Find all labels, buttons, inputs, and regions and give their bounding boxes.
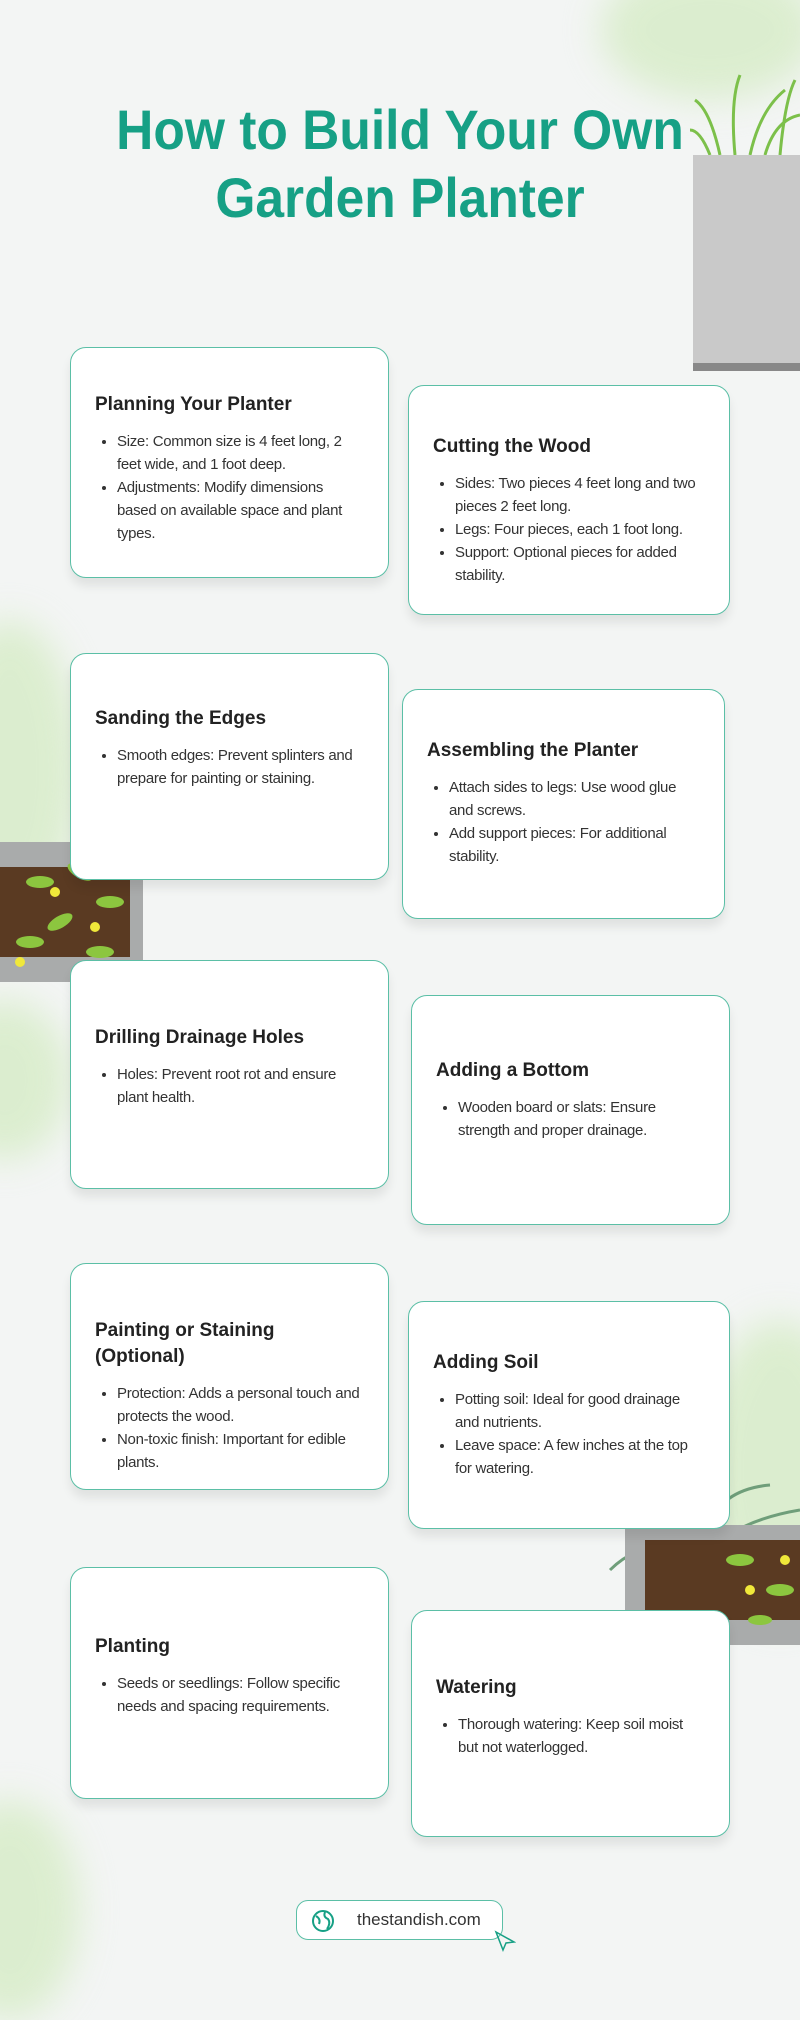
card: Drilling Drainage Holes <box>70 960 389 1189</box>
card: Sanding the Edges: Sanding the Edges <box>95 708 266 729</box>
title <box>116 98 684 229</box>
card: Planning Your Planter: Planning Your Planter <box>95 394 292 415</box>
card: Sanding the Edges <box>70 653 389 880</box>
card: Assembling the Planter: Add support pieces: For additional stability. <box>449 825 666 865</box>
card: Adding a Bottom <box>411 995 730 1225</box>
card: Assembling the Planter <box>402 689 725 919</box>
card: Drilling Drainage Holes: Holes: Prevent root rot and ensure plant health. <box>117 1066 336 1106</box>
card: Cutting the Wood: Cutting the Wood <box>433 436 591 457</box>
card: Sanding the Edges: Smooth edges: Prevent splinters and prepare for painting or staining. <box>117 747 352 787</box>
card: Adding a Bottom: Wooden board or slats: Ensure strength and proper drainage. <box>458 1099 656 1139</box>
card: Painting or Staining: Non-toxic finish: Important for edible plants. <box>117 1431 346 1471</box>
title: Garden Planter <box>215 166 585 229</box>
card: Painting or Staining: Painting or Staining (Optional) <box>95 1320 274 1367</box>
card: Cutting the Wood <box>408 385 730 615</box>
card: Assembling the Planter: Attach sides to legs: Use wood glue and screws. <box>449 779 676 819</box>
card: Watering <box>411 1610 730 1837</box>
card: Watering: Watering <box>436 1677 517 1698</box>
card: Planning Your Planter: Size: Common size is 4 feet long, 2 feet wide, and 1 foot deep. <box>117 433 342 473</box>
card: Adding Soil: Leave space: A few inches at the top for watering. <box>455 1437 688 1477</box>
card: Painting or Staining <box>70 1263 389 1490</box>
icon: concrete planter top right <box>690 74 800 371</box>
card: Planting: Seeds or seedlings: Follow specific needs and spacing requirements. <box>117 1675 340 1715</box>
footer: website pill <box>296 1900 503 1940</box>
footer: website pill: thestandish.com <box>357 1910 481 1929</box>
card: Adding a Bottom: Adding a Bottom <box>436 1060 589 1081</box>
icon: left planter with leaves <box>0 842 143 982</box>
card: Watering: Thorough watering: Keep soil moist but not waterlogged. <box>458 1716 683 1756</box>
card: Painting or Staining: Protection: Adds a personal touch and protects the wood. <box>117 1385 359 1425</box>
icon: right planter with plants <box>609 1484 800 1645</box>
card: Planting <box>70 1567 389 1799</box>
icon: globe <box>312 1910 334 1932</box>
card: Cutting the Wood: Sides: Two pieces 4 feet long and two pieces 2 feet long. <box>455 475 695 515</box>
card: Adding Soil: Adding Soil <box>433 1352 539 1373</box>
icon: cursor <box>494 1930 516 1952</box>
card: Cutting the Wood: Legs: Four pieces, each 1 foot long. <box>455 521 683 538</box>
title: How to Build Your Own <box>116 98 684 161</box>
card: Planning Your Planter: Adjustments: Modify dimensions based on available space and plant types. <box>117 479 342 542</box>
card: Assembling the Planter: Assembling the Planter <box>427 740 638 761</box>
card: Planning Your Planter <box>70 347 389 578</box>
card: Cutting the Wood: Support: Optional pieces for added stability. <box>455 544 677 584</box>
card: Adding Soil <box>408 1301 730 1529</box>
card: Adding Soil: Potting soil: Ideal for good drainage and nutrients. <box>455 1391 680 1431</box>
card: Drilling Drainage Holes: Drilling Drainage Holes <box>95 1027 304 1048</box>
card: Planting: Planting <box>95 1636 170 1657</box>
